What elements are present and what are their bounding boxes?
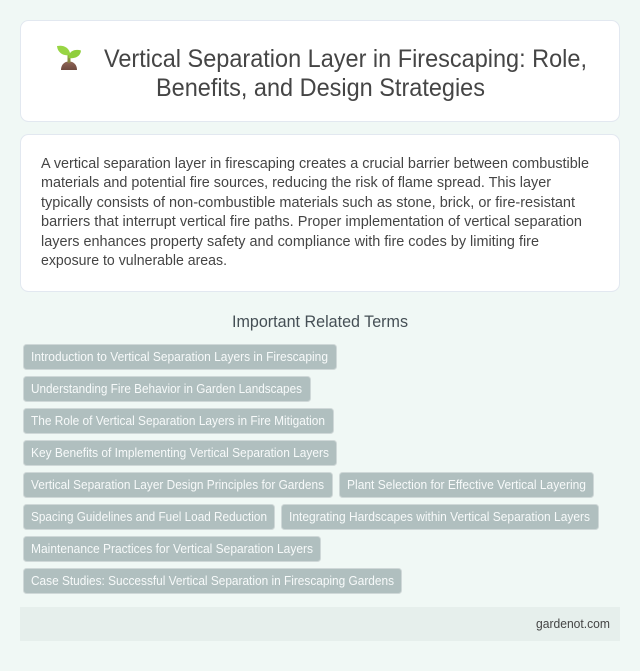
tag: key benefits: Key Benefits of Implementing Vertical Separation Layers xyxy=(31,446,329,460)
tag: role xyxy=(24,408,334,434)
text block: description: A vertical separation layer in firescaping creates a crucial barrier between combustible xyxy=(41,156,589,172)
tag: design principles: Vertical Separation Layer Design Principles for Gardens xyxy=(31,478,324,492)
text block: description xyxy=(41,156,589,269)
tag: hardscapes xyxy=(282,504,598,530)
tag: role: The Role of Vertical Separation Layers in Fire Mitigation xyxy=(31,414,325,428)
tag: spacing guidelines: Spacing Guidelines and Fuel Load Reduction xyxy=(31,510,267,524)
heading: Benefits, and Design Strategies xyxy=(156,74,485,102)
footer text: gardenot.com xyxy=(536,617,610,631)
tag: plant selection: Plant Selection for Effective Vertical Layering xyxy=(347,478,586,492)
tag: maintenance: Maintenance Practices for Vertical Separation Layers xyxy=(31,542,313,556)
text block: description: exposure to vulnerable areas. xyxy=(41,253,227,269)
icon: seedling xyxy=(57,46,81,70)
tag: maintenance xyxy=(24,536,320,562)
tag: spacing guidelines xyxy=(24,504,274,530)
tag: case studies xyxy=(24,568,402,594)
heading: related terms: Important Related Terms xyxy=(232,313,408,331)
heading xyxy=(104,45,587,102)
tag: introduction xyxy=(24,344,336,370)
tag: design principles xyxy=(24,472,332,498)
panel: description card xyxy=(20,134,620,292)
tag: fire behavior: Understanding Fire Behavior in Garden Landscapes xyxy=(31,382,302,396)
text block: description: materials and potential fire sources, reducing the risk of flame spread. This layer xyxy=(41,175,551,191)
footer bar xyxy=(20,607,620,641)
panel: related term tags xyxy=(24,344,598,594)
tag: introduction: Introduction to Vertical Separation Layers in Firescaping xyxy=(31,350,328,364)
tag: plant selection xyxy=(340,472,594,498)
heading: Vertical Separation Layer in Firescaping: Role, xyxy=(104,45,587,73)
tag: case studies: Case Studies: Successful Vertical Separation in Firescaping Gardens xyxy=(31,574,394,588)
panel: title card xyxy=(20,20,620,122)
text block: description: barriers that interrupt vertical fire paths. Proper implementation of vertical separation xyxy=(41,214,582,230)
tag: fire behavior xyxy=(24,376,310,402)
text block: description: layers enhances property safety and compliance with fire codes by limiting fire xyxy=(41,234,539,250)
tag: hardscapes: Integrating Hardscapes within Vertical Separation Layers xyxy=(289,510,590,524)
tag: key benefits xyxy=(24,440,336,466)
text block: description: typically consists of non-combustible materials such as stone, brick, or fire-resistant xyxy=(41,195,575,211)
